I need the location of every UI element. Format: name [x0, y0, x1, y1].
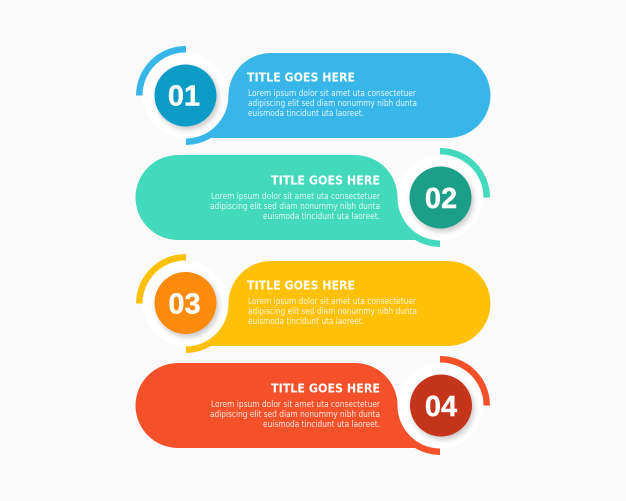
- banner 04: [136, 363, 440, 455]
- badge 03: [154, 272, 216, 334]
- arc 01: [136, 46, 186, 96]
- body 04: euismoda tincidunt uta laoreet.: [263, 420, 380, 430]
- title 04: TITLE GOES HERE: [271, 382, 380, 396]
- body 02: adipiscing elit sed diam nonummy nibh dunta: [210, 202, 380, 212]
- number 04: 04: [425, 391, 457, 423]
- panel: step 01: [136, 46, 490, 145]
- body 03: adipiscing elit sed diam nonummy nibh dunta: [248, 307, 417, 317]
- banner 01: [186, 53, 490, 145]
- body 04: adipiscing elit sed diam nonummy nibh dunta: [210, 410, 380, 420]
- badge 02: [410, 166, 472, 228]
- arc 03: [136, 254, 186, 304]
- ring 02: [398, 155, 483, 240]
- banner 02: [136, 155, 440, 247]
- panel: step 02: [136, 148, 490, 247]
- body 01: adipiscing elit sed diam nonummy nibh dunta: [248, 99, 417, 109]
- panel: step 04: [136, 356, 490, 455]
- badge 01: [154, 64, 216, 126]
- ring 01: [143, 53, 228, 138]
- body 03: Lorem ipsum dolor sit amet uta consectetuer: [248, 297, 416, 307]
- banner 03: [186, 261, 490, 353]
- body 03: euismoda tincidunt uta laoreet.: [248, 317, 364, 327]
- body 04: [210, 400, 380, 430]
- ring 04: [398, 363, 483, 448]
- body 01: euismoda tincidunt uta laoreet.: [248, 109, 364, 119]
- title 01: TITLE GOES HERE: [247, 70, 355, 84]
- badge 04: [410, 374, 472, 436]
- body 03: [248, 297, 417, 327]
- body 02: [210, 192, 380, 222]
- title 02: TITLE GOES HERE: [271, 174, 380, 188]
- number 03: 03: [168, 288, 201, 320]
- arc 02: [440, 148, 490, 198]
- body 01: Lorem ipsum dolor sit amet uta consectetuer: [248, 89, 416, 99]
- title 03: TITLE GOES HERE: [247, 278, 355, 292]
- number 02: 02: [425, 183, 457, 215]
- arc 04: [440, 356, 490, 406]
- body 01: [248, 89, 417, 119]
- body 02: Lorem ipsum dolor sit amet uta consectetuer: [211, 192, 380, 202]
- number 01: 01: [168, 80, 200, 112]
- body 02: euismoda tincidunt uta laoreet.: [263, 212, 380, 222]
- ring 03: [143, 261, 228, 346]
- panel: step 03: [136, 254, 490, 353]
- body 04: Lorem ipsum dolor sit amet uta consectetuer: [211, 400, 380, 410]
